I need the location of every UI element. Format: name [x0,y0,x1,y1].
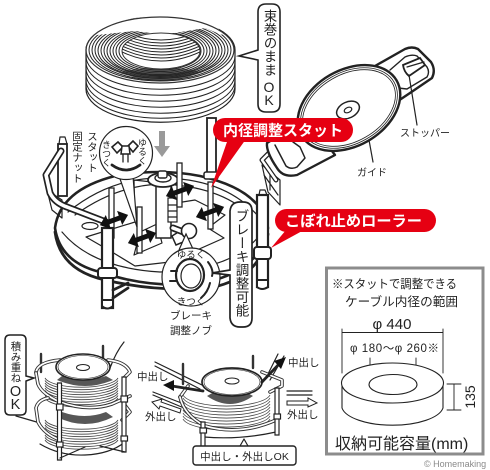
red callout: 内径調整スタット [211,118,353,188]
dimension 135 [447,384,461,410]
capacity caption: 収納可能容量(mm) [335,435,468,453]
label: 外出し left: 外出し [145,411,176,423]
note text: ※スタットで調整できる [332,277,457,291]
cables and back posts [153,354,312,408]
label: スタット固定ナット: 固定ナット [71,131,83,184]
callout: 束巻のままOK: O [264,79,275,95]
plate [86,180,225,266]
label: 中出し upper right: 中出し [288,356,320,369]
stacked reels illustration [16,342,130,460]
panel: capacity dimensions: 135 [462,385,478,409]
panel: capacity dimensions: ケーブル内径の範囲 [345,294,458,309]
label: スタット固定ナット [71,131,98,184]
credit: © Homemaking [424,459,486,469]
callout: 束巻のままOK [239,4,280,112]
label: ガイド [357,140,387,179]
posts [201,388,279,448]
callout: 束巻のままOK: 束巻のまま [262,9,277,76]
callout: 中出し・外出しOK [193,439,296,465]
panel: capacity dimensions [326,268,483,454]
wing nut inset: ゆるく [137,138,147,165]
back posts [41,346,103,372]
hinge frame [262,165,280,205]
label: ストッパー [400,75,450,140]
label: スタット固定ナット: スタット [86,131,98,173]
coil top highlight [92,14,222,37]
center and outer feed reel illustration [152,354,317,448]
brake knob inset [162,234,220,308]
guide and stopper [262,48,434,205]
red callout: こぼれ止めローラー: こぼれ止めローラー [285,213,422,230]
posts [58,377,126,460]
hub [156,186,171,238]
double arrows [97,208,131,232]
dimension φ440: φ 440 [373,316,411,333]
dimension φ180〜φ260: φ 180〜φ 260※ [350,343,439,355]
lower coil [45,420,118,429]
arrows [262,362,281,382]
wing nut inset: きつく [101,140,111,167]
upper-right handle [375,48,434,105]
callout: 中出し・外出しOK: 中出し・外出しOK [200,450,289,463]
coil [183,395,270,406]
upper coil [45,378,118,387]
red callout: 内径調整スタット: 内径調整スタット [223,122,343,140]
back left post and tube frame [58,144,67,196]
callout: 積み重ねOK: O [10,384,21,400]
callout: 束巻のままOK: K [264,92,274,108]
tube rings [180,372,282,397]
top disc [202,368,262,396]
cable reel main unit [46,118,271,308]
front right post [257,195,268,287]
lower-left loop [267,135,335,176]
callout: ブレーキ調整可能: ブレーキ調整可能 [234,209,249,317]
capacity ring drawing [342,385,443,425]
gray down arrow [154,131,170,157]
back right post [207,118,216,176]
cable coil illustration [86,14,235,122]
label: 外出し right: 外出し [287,409,318,421]
label: ブレーキ: ブレーキ [170,309,212,322]
callout: 積み重ねOK: K [11,397,21,413]
top disc [56,354,110,380]
label: 中出し left: 中出し [137,370,168,383]
front left post [102,228,113,308]
stopper [403,58,425,76]
callout: ブレーキ調整可能 [212,202,252,327]
wing nut inset [100,126,152,227]
callout: 積み重ねOK [5,335,34,415]
tube rings [36,360,130,378]
label: ガイド: ガイド [357,167,387,179]
brake knob inset: ゆるく [177,250,205,261]
red callout: こぼれ止めローラー [271,209,436,248]
knob [173,228,186,233]
label: ストッパー: ストッパー [400,128,450,140]
inner stud posts [109,188,114,238]
callout: 積み重ねOK: 積み重ね [10,340,22,383]
label: 調整ノブ: 調整ノブ [170,324,212,337]
brake knob inset: きつく [177,297,205,308]
guide disc [282,48,416,168]
tray [55,172,268,284]
